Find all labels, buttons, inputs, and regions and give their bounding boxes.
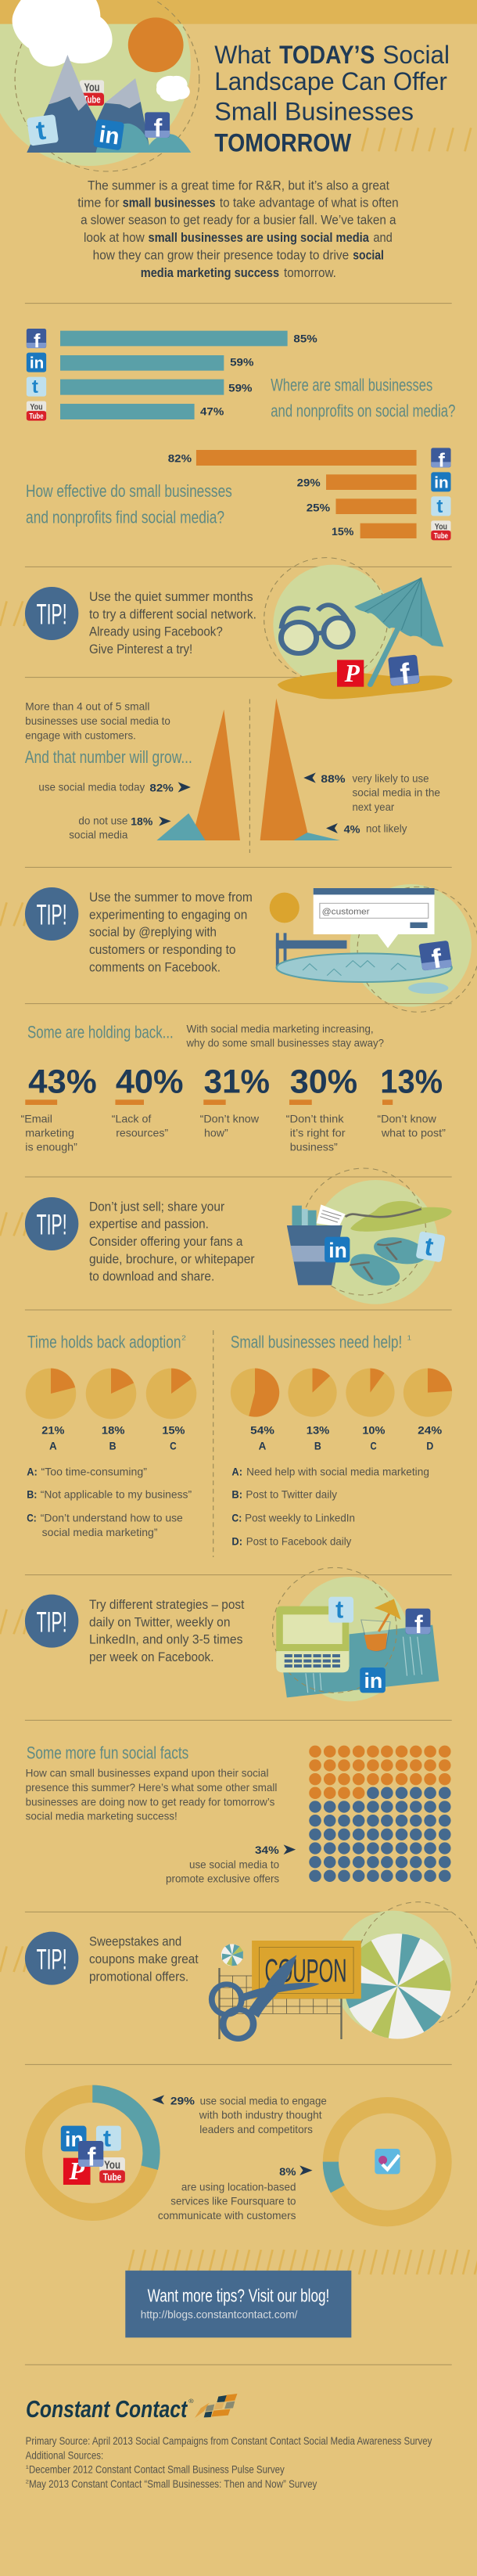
fun facts text [26,1768,277,1822]
icon: Twitter: t [34,116,48,146]
pie charts: need help: 54% [250,1425,274,1437]
heading: time holds back adoption: Time holds back adoption [27,1333,181,1352]
tip text: to try a different social network. [89,607,256,621]
illustration: mountains, clouds and sun [0,0,477,171]
panel: 34 percent callout and tip five [0,1844,477,2064]
donut chart: 29 percent [25,2085,160,2221]
fun facts text: How can small businesses expand upon their social [26,1768,269,1779]
bar chart: where small businesses are: 47% [200,406,224,418]
intro text: media marketing success [141,265,279,280]
title: TODAY’S [279,41,375,69]
intro text: to take advantage of what is often [220,196,399,210]
icon: Facebook: f [154,113,163,142]
tip text: Try different strategies – post [89,1597,244,1612]
icon: LinkedIn [360,1668,386,1693]
tip text: Don’t just sell; share your [89,1200,224,1214]
tip text [89,1934,199,1984]
fun facts text: businesses are doing now to get ready for tomorrow’s [26,1796,275,1808]
sources: 2 [26,2478,29,2484]
intro text: and [373,230,393,245]
callout: 29 percent: with both industry thought [199,2110,322,2121]
icon: Facebook: f [438,449,445,471]
icon: Twitter [415,1230,446,1263]
pie charts: need help: 10% [362,1425,386,1437]
panel: tip two and holding back [0,884,477,1177]
legend: adoption C: social media marketing” [42,1527,158,1539]
tip text: experimenting to engaging on [89,908,247,922]
logo: Constant Contact: Constant Contact [26,2396,188,2423]
bar chart: how effective: 82% [168,452,192,465]
tip text [89,1597,244,1664]
icon: LinkedIn: in [364,1669,382,1693]
heading: how effective: How effective do small businesses [26,482,232,502]
footer [25,2365,452,2491]
icon: Pinterest: P [344,660,360,687]
legend: help A and B: A: [231,1466,242,1478]
title: What [214,41,271,69]
chart: triangles [156,698,340,853]
legend: adoption C [27,1513,183,1539]
pie charts: need help: B [314,1440,321,1452]
pie charts: time holds back adoption [26,1369,196,1452]
tip text: Use the summer to move from [89,890,253,905]
stat: 43 percent: marketing [25,1128,74,1139]
stat: 31 percent: “Don’t know [200,1113,260,1125]
icon: Facebook [78,2141,103,2171]
callout: 8 percent: services like Foursquare to [170,2196,296,2207]
icon: Twitter [328,1596,353,1624]
icon: Facebook [27,329,46,352]
legend: help C and D: C: [231,1513,242,1524]
bar chart: how effective [168,448,451,541]
tip text: expertise and passion. [89,1217,209,1231]
heading: holding back: Some are holding back... [27,1023,174,1042]
icon: Twitter: t [32,376,38,398]
tip badge: TIP! [37,1942,67,1976]
pie charts: time holds back adoption: C [170,1440,177,1452]
tip text [89,890,253,974]
icon: Facebook: f [429,943,445,974]
growth text: More than 4 out of 5 small [25,701,149,713]
stat: 31 percent: 31% [204,1063,270,1100]
growth text [25,701,170,742]
legend: help A and B: Post to Twitter daily [246,1489,337,1501]
tip text [89,1200,255,1283]
legend: help C and D: Post weekly to LinkedIn [245,1513,355,1524]
icon: LinkedIn: in [328,1239,347,1262]
icon: Twitter: t [436,496,443,517]
labels: current use: use social media today [38,782,145,793]
legend: adoption C: “Don’t understand how to use [41,1513,183,1524]
icon: Facebook [388,655,420,691]
icon: Twitter [431,496,451,517]
labels: current use: social media [69,829,128,841]
subheading: With social media marketing increasing, [186,1023,374,1035]
stat: 43 percent: “Email [20,1113,52,1125]
growth text: engage with customers. [25,729,136,742]
callout: 8 percent: 8% [279,2166,296,2178]
stat: 40 percent: 40% [116,1063,184,1100]
logo: Constant Contact: ® [188,2398,194,2405]
icon: YouTube: You [84,81,99,94]
sources: May 2013 Constant Contact “Small Businesses: Then and Now” Survey [29,2478,317,2491]
icon: YouTube: Tube [83,93,101,106]
icon: Facebook [431,448,451,471]
legend: adoption C: C: [27,1513,37,1524]
icon: YouTube: Tube [103,2171,121,2182]
panel: legends, tip four and fun facts [0,1513,452,1882]
legend: help C and D: Post to Facebook daily [246,1535,352,1548]
tip badge [25,1197,78,1250]
icon: YouTube: Tube [434,532,448,541]
tip badge: TIP! [37,1208,67,1241]
labels: current use: 82% [149,783,174,794]
callout: 34 percent [166,1844,296,1885]
stat: 40 percent: “Lack of [112,1113,152,1125]
stat: 40 percent [112,1063,184,1139]
tip text: Give Pinterest a try! [89,642,192,657]
stat: 31 percent [200,1063,270,1139]
icon: YouTube: Tube [29,412,44,421]
icon: Pinterest [337,660,364,687]
heading: time holds back adoption [27,1333,186,1352]
stat: 43 percent: is enough” [25,1142,77,1153]
pie charts: need help: A [259,1440,266,1452]
tip text: social by @replying with [89,925,217,939]
stat: 40 percent: resources” [116,1128,168,1139]
icon: LinkedIn [27,353,46,372]
tip text: daily on Twitter, weekly on [89,1615,230,1629]
callout: 8 percent: communicate with customers [158,2210,296,2222]
tip badge [25,1595,78,1648]
tip badge: TIP! [37,598,67,631]
icon: Twitter [27,114,59,147]
pie charts: need help: 13% [307,1425,330,1437]
callout: blog box: Want more tips? Visit our blog! [148,2286,329,2306]
illustration: coupon sign, scissors and pinwheel [212,1902,477,2039]
icon: YouTube: You [435,522,447,531]
bar chart: how effective: 29% [297,477,321,489]
dot grid: 34 of 100 [309,1746,451,1882]
tip badge [25,1932,78,1985]
labels: future use: 88% [321,773,346,786]
icon: YouTube [80,80,104,106]
intro text [77,178,399,280]
heading: how effective [26,482,232,527]
tip text: promotional offers. [89,1970,188,1984]
header section [0,0,477,304]
callout: 29 percent: leaders and competitors [199,2124,313,2136]
icon: LinkedIn [93,119,124,150]
tip text: Sweepstakes and [89,1934,181,1948]
icon: LinkedIn: in [98,122,121,150]
heading: how effective: and nonprofits find social media? [26,508,224,527]
intro text: time for [77,196,119,210]
stat: 30 percent: it’s right for [290,1128,346,1139]
icon: Foursquare [375,2149,400,2174]
tip text: to download and share. [89,1269,214,1283]
legend: adoption A and B: A: [27,1466,38,1478]
icon: Twitter: t [422,1232,436,1261]
legend: adoption A and B [27,1466,192,1501]
icon: Facebook: f [414,1610,423,1639]
subheading [186,1023,384,1049]
legend: help A and B: B: [231,1489,242,1501]
icon: YouTube [431,520,451,541]
bar chart: where small businesses are: 85% [293,333,317,345]
callout: 29 percent: 29% [170,2095,195,2107]
panel: donut charts and blog callout [25,2085,477,2337]
labels: future use: next year [352,801,394,814]
intro text: social [353,248,384,262]
icon: LinkedIn [325,1237,350,1262]
pie charts: time holds back adoption: 21% [41,1425,65,1437]
labels: future use [303,772,440,836]
tip text [89,589,256,657]
icon: Twitter [27,376,46,398]
legend: adoption A and B: B: [27,1489,37,1501]
stat: 30 percent: business” [290,1142,338,1153]
illustration: coupon sign, scissors and pinwheel: COUPON [264,1952,346,1989]
labels: future use: not likely [366,822,407,835]
icon: LinkedIn [61,2126,86,2151]
icon: Twitter [96,2126,121,2152]
intro text: small businesses [123,196,215,210]
tip text: Already using Facebook? [89,624,223,639]
growth text: businesses use social media to [25,715,170,728]
labels: future use: social media in the [352,787,440,799]
icon: LinkedIn: in [434,473,449,491]
illustration: bag, hat and sandals [287,1168,452,1304]
icon: Facebook: f [399,657,412,690]
stat: 30 percent: 30% [290,1063,357,1100]
tip text: Use the quiet summer months [89,589,253,604]
icon: YouTube: You [104,2159,120,2171]
icon: Facebook [145,112,170,142]
title: Small Businesses [214,99,414,126]
tip text: guide, brochure, or whitepaper [89,1252,255,1266]
icon: LinkedIn [431,472,451,491]
heading: and that number will grow: And that number will grow... [25,748,192,768]
tip text: LinkedIn, and only 3-5 times [89,1632,242,1646]
bar chart: how effective: 15% [332,526,354,538]
icon: Facebook [406,1609,430,1639]
stat: 31 percent: how” [204,1128,228,1139]
stat: 13 percent: 13% [380,1063,443,1100]
illustration: pool with speech bubble [270,884,477,1012]
stat: 30 percent [286,1063,357,1153]
icon: Pinterest: P [69,2157,85,2185]
panel: tip three and pie charts [0,1168,452,1557]
icon: Pinterest [63,2157,91,2185]
heading: some more fun social facts: Some more fun social facts [27,1743,188,1763]
intro text: a slower season to get ready for a busier fall. We’ve taken a [81,213,396,227]
stat: 43 percent [20,1063,97,1153]
legend: help A and B [231,1466,429,1501]
illustration: laptop on beach towel with drink [273,1567,439,1701]
icon: Facebook: f [88,2142,95,2171]
bar chart: where small businesses are: 59% [230,357,254,369]
pie charts: time holds back adoption: A [49,1440,57,1452]
callout: 34 percent: use social media to [189,1858,279,1871]
sources [26,2435,432,2491]
pie charts: need help [231,1369,452,1452]
illustration: pool with speech bubble: @customer [322,908,370,916]
legend: adoption A and B: “Not applicable to my business” [41,1489,192,1501]
tip text: per week on Facebook. [89,1650,213,1664]
intro text: how they can grow their presence today to drive [93,248,349,262]
callout: 34 percent: promote exclusive offers [166,1873,279,1885]
stat: 13 percent: “Don’t know [377,1113,437,1125]
labels: current use [38,782,191,841]
intro text: look at how [84,230,145,245]
panel: tip one and growth chart [0,558,452,867]
tip text: customers or responding to [89,942,235,957]
intro text: The summer is a great time for R&R, but it’s also a great [88,178,389,192]
sources: 1 [26,2464,29,2470]
bar chart: where small businesses are [27,329,317,421]
title: Social [382,41,450,69]
pie charts: need help: C [370,1440,377,1452]
tip text: Consider offering your fans a [89,1234,243,1249]
pie charts: need help: 24% [418,1425,443,1437]
pie charts: time holds back adoption: B [109,1440,117,1452]
callout: 8 percent: are using location-based [181,2181,296,2193]
bar chart: where small businesses are: 59% [228,383,253,394]
legend: adoption A and B: “Too time-consuming” [41,1466,147,1478]
intro text: tomorrow. [284,265,336,280]
sources: December 2012 Constant Contact Small Business Pulse Survey [29,2464,285,2476]
legend: help C and D [231,1513,355,1548]
bar chart: how effective: 25% [307,502,331,514]
callout: 29 percent: use social media to engage [200,2095,327,2107]
sources: Additional Sources: [26,2449,103,2462]
tip badge [25,887,78,941]
callout: blog box: http://blogs.constantcontact.com/ [141,2308,298,2321]
stat: 30 percent: “Don’t think [286,1113,344,1125]
decorative stripes [362,128,471,151]
stat: 13 percent [377,1063,446,1139]
stat: 13 percent: what to post” [381,1128,446,1139]
decorative stripes [127,2250,477,2275]
labels: current use: do not use [78,815,127,827]
callout: 34 percent: 34% [255,1844,279,1857]
pie charts: time holds back adoption: 18% [102,1425,125,1437]
fun facts text: presence this summer? Here’s what some other small [26,1782,277,1794]
icon: Twitter: t [335,1596,343,1624]
tip text: coupons make great [89,1952,199,1966]
donut chart: 8 percent [323,2097,452,2226]
tip badge: TIP! [37,898,67,931]
heading: time holds back adoption: 2 [181,1333,186,1342]
icon: YouTube [99,2157,125,2183]
legend: help C and D: D: [231,1535,242,1548]
icon: LinkedIn: in [65,2128,84,2151]
tip badge: TIP! [37,1605,67,1639]
labels: future use: 4% [344,823,360,836]
icon: Facebook [418,941,453,976]
stat: 43 percent: 43% [28,1063,97,1100]
title [214,41,450,157]
heading: where [271,376,455,421]
callout: blog box [125,2271,351,2337]
icon: YouTube [27,401,46,421]
pie charts: time holds back adoption: 15% [162,1425,185,1437]
legend: help A and B: Need help with social media marketing [246,1466,429,1478]
pie charts: need help: D [426,1440,433,1452]
heading: small businesses need help: 1 [407,1333,411,1342]
tip text: comments on Facebook. [89,960,221,974]
icon: Facebook: f [34,330,41,352]
intro text: small businesses are using social media [148,230,370,245]
panel: social media usage and effectiveness bars [25,329,455,567]
subheading: why do some small businesses stay away? [186,1038,384,1049]
icon: Twitter: t [103,2126,111,2152]
fun facts text: social media marketing success! [26,1811,178,1822]
icon: YouTube: You [30,403,43,412]
tip badge [25,587,78,640]
title: TOMORROW [214,130,351,157]
labels: current use: 18% [131,815,153,828]
illustration: beach with glasses and umbrella [264,558,452,699]
callout: 29 percent [152,2095,327,2136]
icon: LinkedIn: in [30,354,44,372]
labels: future use: very likely to use [352,772,429,785]
callout: 8 percent [158,2165,313,2222]
